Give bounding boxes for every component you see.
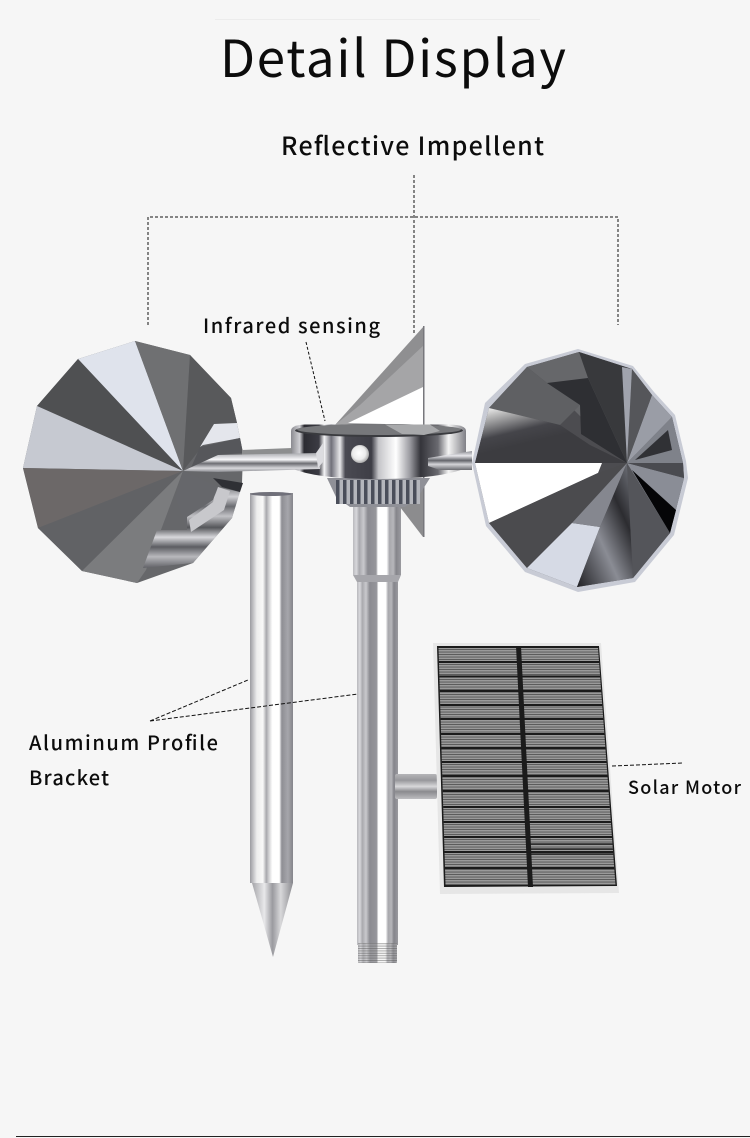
solar cells <box>435 648 620 886</box>
sensor ball <box>351 445 369 463</box>
left impeller <box>23 341 243 583</box>
label: aluminum profile bracket: Aluminum Profile <box>29 727 218 756</box>
leader: aluminum profile bracket <box>150 680 358 721</box>
faint top rule <box>215 19 540 20</box>
hub <box>291 424 466 507</box>
leader: solar motor <box>612 763 683 766</box>
right impeller <box>472 349 688 592</box>
left arm <box>183 443 323 472</box>
bottom rule <box>16 1136 750 1137</box>
center bus bar <box>516 646 533 887</box>
right arm <box>428 451 472 470</box>
side bracket <box>395 774 437 799</box>
rear fin <box>335 326 424 537</box>
label: infrared sensing: Infrared sensing <box>203 310 380 339</box>
chrome inner arm <box>143 487 240 568</box>
main pole <box>353 505 401 963</box>
leader: infrared sensing <box>306 342 325 421</box>
solar panel <box>433 643 620 894</box>
label: reflective impellent: Reflective Impellent <box>281 127 544 163</box>
label: aluminum profile bracket: Bracket <box>29 762 109 791</box>
leader: reflective impellent bracket <box>148 175 618 335</box>
stake <box>250 492 293 957</box>
title: Detail Display <box>220 18 566 92</box>
label: solar motor: Solar Motor <box>628 774 742 800</box>
